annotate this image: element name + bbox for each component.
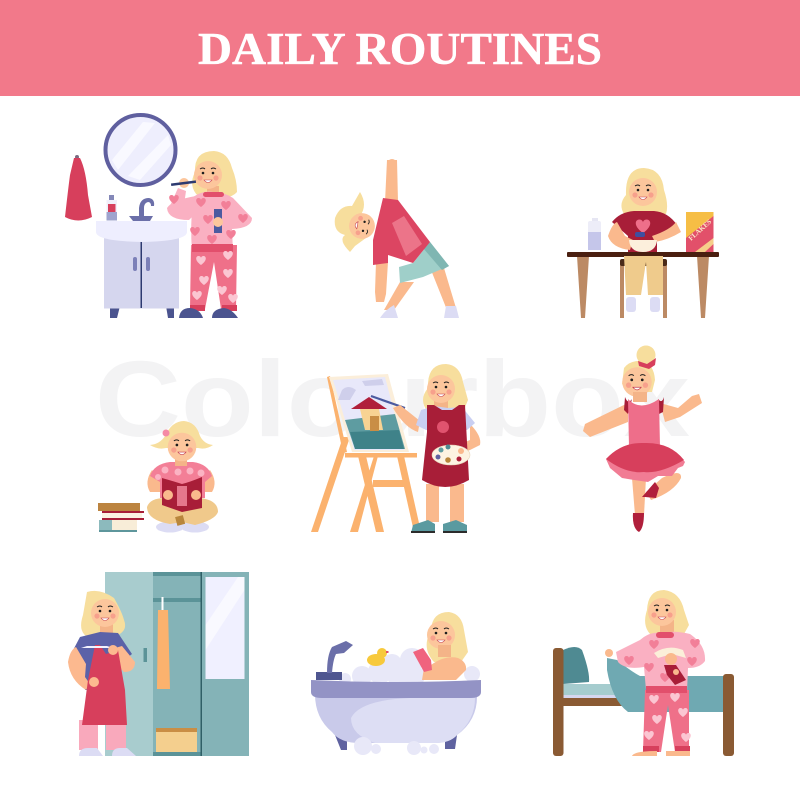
easel: [311, 376, 421, 532]
scene: brushing teeth: [65, 115, 252, 318]
icon: hanging towel: [157, 610, 170, 689]
title: DAILY ROUTINES: [198, 23, 602, 74]
icon: shower head: [316, 641, 353, 680]
bath foam bubbles: [339, 648, 480, 686]
scene: choosing clothes: [68, 572, 249, 756]
foam below tub: [354, 737, 439, 755]
rag doll: [654, 648, 686, 685]
scene: breakfast: [567, 168, 719, 318]
storage box: [156, 728, 197, 752]
scene: bath: [311, 612, 481, 755]
wardrobe: [105, 572, 249, 756]
title banner: [0, 0, 800, 96]
girl with doll: [605, 590, 705, 756]
icon: rubber duck: [367, 648, 388, 666]
watermark: Colourbox: [95, 338, 690, 459]
girl eating: [608, 168, 681, 312]
scene: making the bed: [553, 590, 734, 756]
girl reading: [147, 421, 218, 532]
table and chair: [567, 252, 719, 318]
painting on canvas: [329, 374, 409, 452]
scene: painting: [311, 364, 480, 533]
cereal box: [686, 212, 714, 252]
sink cabinet: [96, 195, 187, 318]
icon: round mirror: [106, 115, 176, 185]
flakes label: FLAKES: [687, 218, 713, 242]
scene: morning exercise: [335, 159, 459, 318]
scene: reading: [98, 421, 218, 532]
scene: ballet: [583, 346, 702, 532]
girl brushing teeth: [167, 151, 252, 318]
girl painting: [393, 364, 480, 533]
bed: [553, 647, 734, 756]
girl dancing: [583, 346, 702, 532]
icon: towel: [65, 155, 92, 220]
bathtub: [311, 680, 481, 750]
milk bottle: [588, 218, 601, 250]
girl in bath: [413, 612, 468, 680]
stack of books: [98, 503, 144, 532]
girl stretching: [335, 159, 459, 318]
girl holding dress: [68, 591, 136, 756]
